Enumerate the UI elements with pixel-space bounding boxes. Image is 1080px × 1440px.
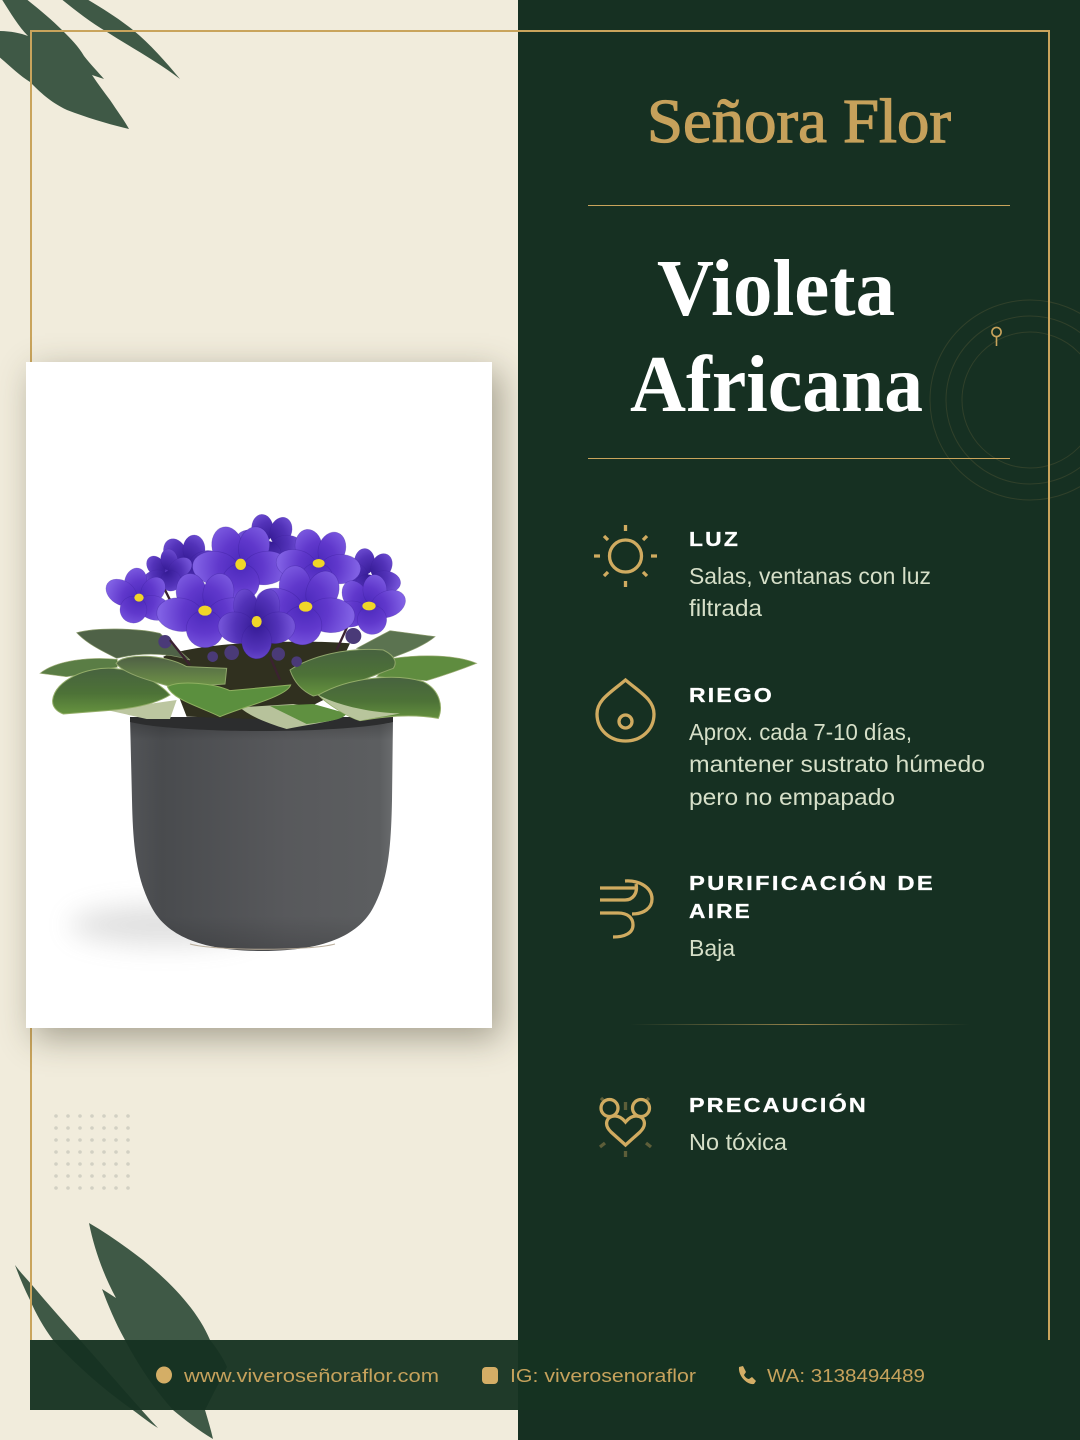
divider top — [588, 205, 1010, 206]
section: precaucion — [689, 1093, 868, 1155]
section: riego: Aprox. cada 7-10 días, — [689, 719, 912, 745]
decorative concentric circles — [930, 300, 1080, 500]
icon: sun — [594, 525, 657, 587]
footer: whatsapp: WA: 3138494489 — [767, 1365, 925, 1386]
panel: dark green right background — [518, 0, 1080, 1440]
icon: wind — [600, 881, 652, 937]
section: riego — [689, 684, 985, 810]
section: precaucion: PRECAUCIÓN — [689, 1093, 868, 1117]
icon: small pin — [992, 327, 1001, 346]
section: luz — [689, 528, 931, 621]
decorative dot grid — [54, 1114, 130, 1190]
section: purificacion de aire: AIRE — [689, 900, 752, 923]
footer band — [30, 1340, 1050, 1410]
plant name: Violeta — [657, 245, 895, 333]
section: riego: pero no empapado — [689, 784, 895, 810]
decorative leaves: bottom left — [15, 1223, 213, 1439]
divider under name — [588, 458, 1010, 459]
plant name: Africana — [630, 341, 923, 429]
buds — [158, 628, 361, 667]
section: riego: mantener sustrato húmedo — [689, 751, 985, 777]
divider lower — [630, 1024, 970, 1025]
plant name — [630, 245, 923, 429]
section: precaucion: No tóxica — [689, 1129, 787, 1155]
pot — [130, 717, 393, 951]
icon: water drop — [597, 680, 654, 741]
plant — [40, 509, 477, 729]
decorative leaves: top left — [0, 0, 180, 129]
section: purificacion de aire: PURIFICACIÓN DE — [689, 871, 935, 895]
panel: cream left background — [0, 0, 518, 1440]
section: luz: filtrada — [689, 595, 762, 621]
footer: website: www.viveroseñoraflor.com — [183, 1365, 439, 1386]
section: luz: Salas, ventanas con luz — [689, 563, 931, 589]
icon: heart caution — [600, 1098, 651, 1157]
stems — [163, 642, 350, 720]
footer: instagram: IG: viverosenoraflor — [510, 1365, 696, 1386]
section: purificacion de aire — [689, 871, 935, 961]
photo card: potted African violet — [13, 351, 518, 1059]
back flowers — [132, 509, 409, 607]
front flowers — [95, 524, 414, 654]
flower centres — [134, 559, 376, 627]
section: riego: RIEGO — [689, 684, 774, 707]
section: luz: LUZ — [689, 528, 740, 551]
section: purificacion de aire: Baja — [689, 935, 735, 961]
brand title: Señora Flor — [647, 88, 951, 156]
pot shadow — [70, 905, 260, 945]
